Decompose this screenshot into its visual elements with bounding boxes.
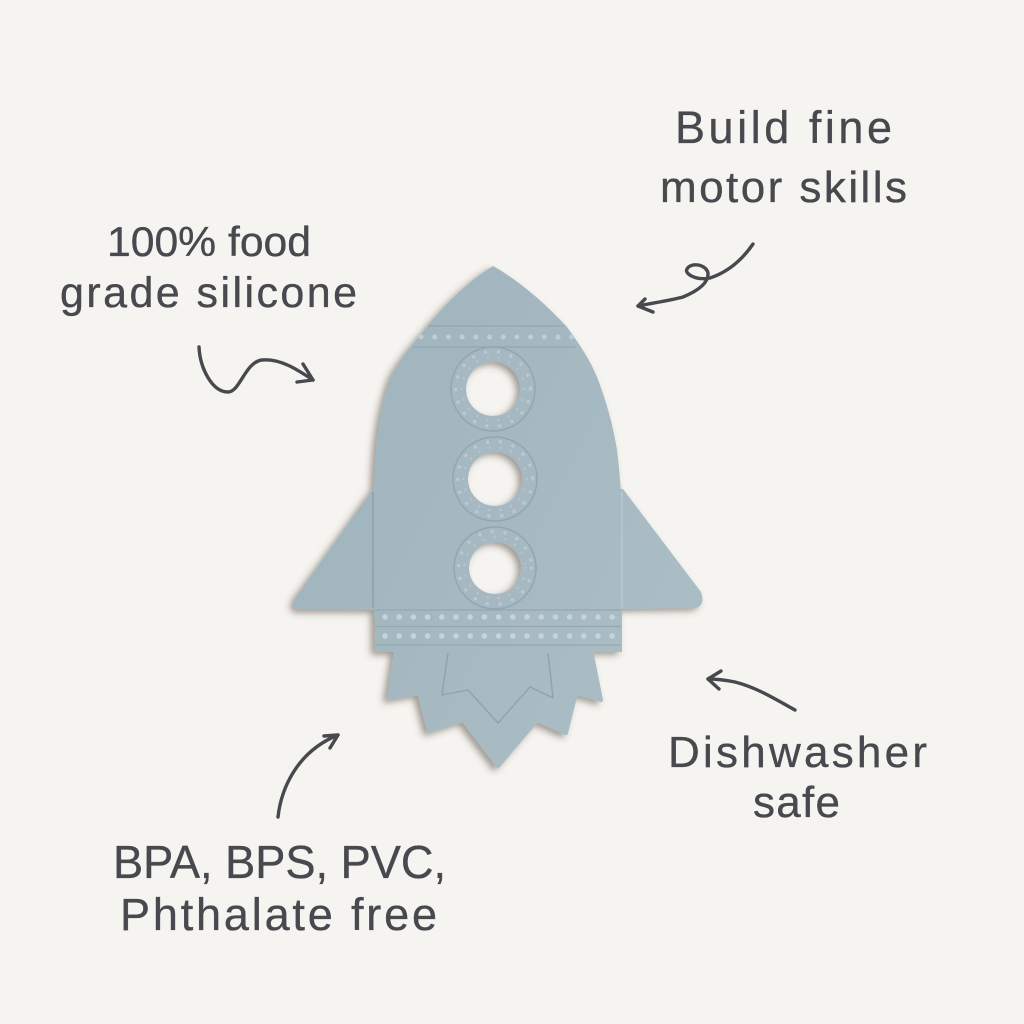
arrow: looped to rocket — [638, 244, 753, 312]
left fin — [294, 489, 378, 610]
label: Dishwasher safe: safe — [753, 778, 840, 827]
porthole 3 — [454, 527, 536, 609]
rocket silhouette — [294, 266, 702, 766]
callout: fine motor skills — [638, 102, 907, 312]
label: BPA, BPS, PVC, Phthalate free: BPA, BPS, PVC, — [113, 836, 446, 888]
arrow: curved to rocket — [278, 735, 338, 817]
rocket teether — [294, 266, 702, 766]
callout: BPA free — [113, 735, 446, 940]
porthole 2 — [453, 437, 537, 521]
flames — [389, 650, 601, 766]
callout: dishwasher safe — [668, 671, 927, 827]
label: BPA, BPS, PVC, Phthalate free: Phthalate free — [120, 889, 437, 940]
fin seams — [373, 492, 622, 608]
top rivet band — [413, 326, 576, 347]
label: 100% food grade silicone: 100% food — [107, 218, 311, 265]
label: Build fine motor skills: Build fine — [675, 102, 892, 153]
label: Dishwasher safe: Dishwasher — [668, 728, 927, 777]
porthole 1 — [451, 347, 535, 431]
label: Dishwasher safe — [668, 728, 927, 827]
label: Build fine motor skills — [660, 102, 907, 212]
callout: food grade silicone — [60, 218, 357, 392]
label: Build fine motor skills: motor skills — [660, 163, 907, 212]
right fin — [619, 489, 702, 609]
label: 100% food grade silicone: grade silicone — [60, 269, 357, 317]
bottom rivet bands — [375, 610, 621, 645]
label: 100% food grade silicone — [60, 218, 357, 317]
arrow: wavy to rocket — [199, 347, 313, 392]
arrow: to rocket — [708, 671, 795, 710]
flame inner outline — [442, 653, 553, 723]
label: BPA, BPS, PVC, Phthalate free — [113, 836, 446, 940]
body with porthole cut-outs — [373, 266, 622, 652]
